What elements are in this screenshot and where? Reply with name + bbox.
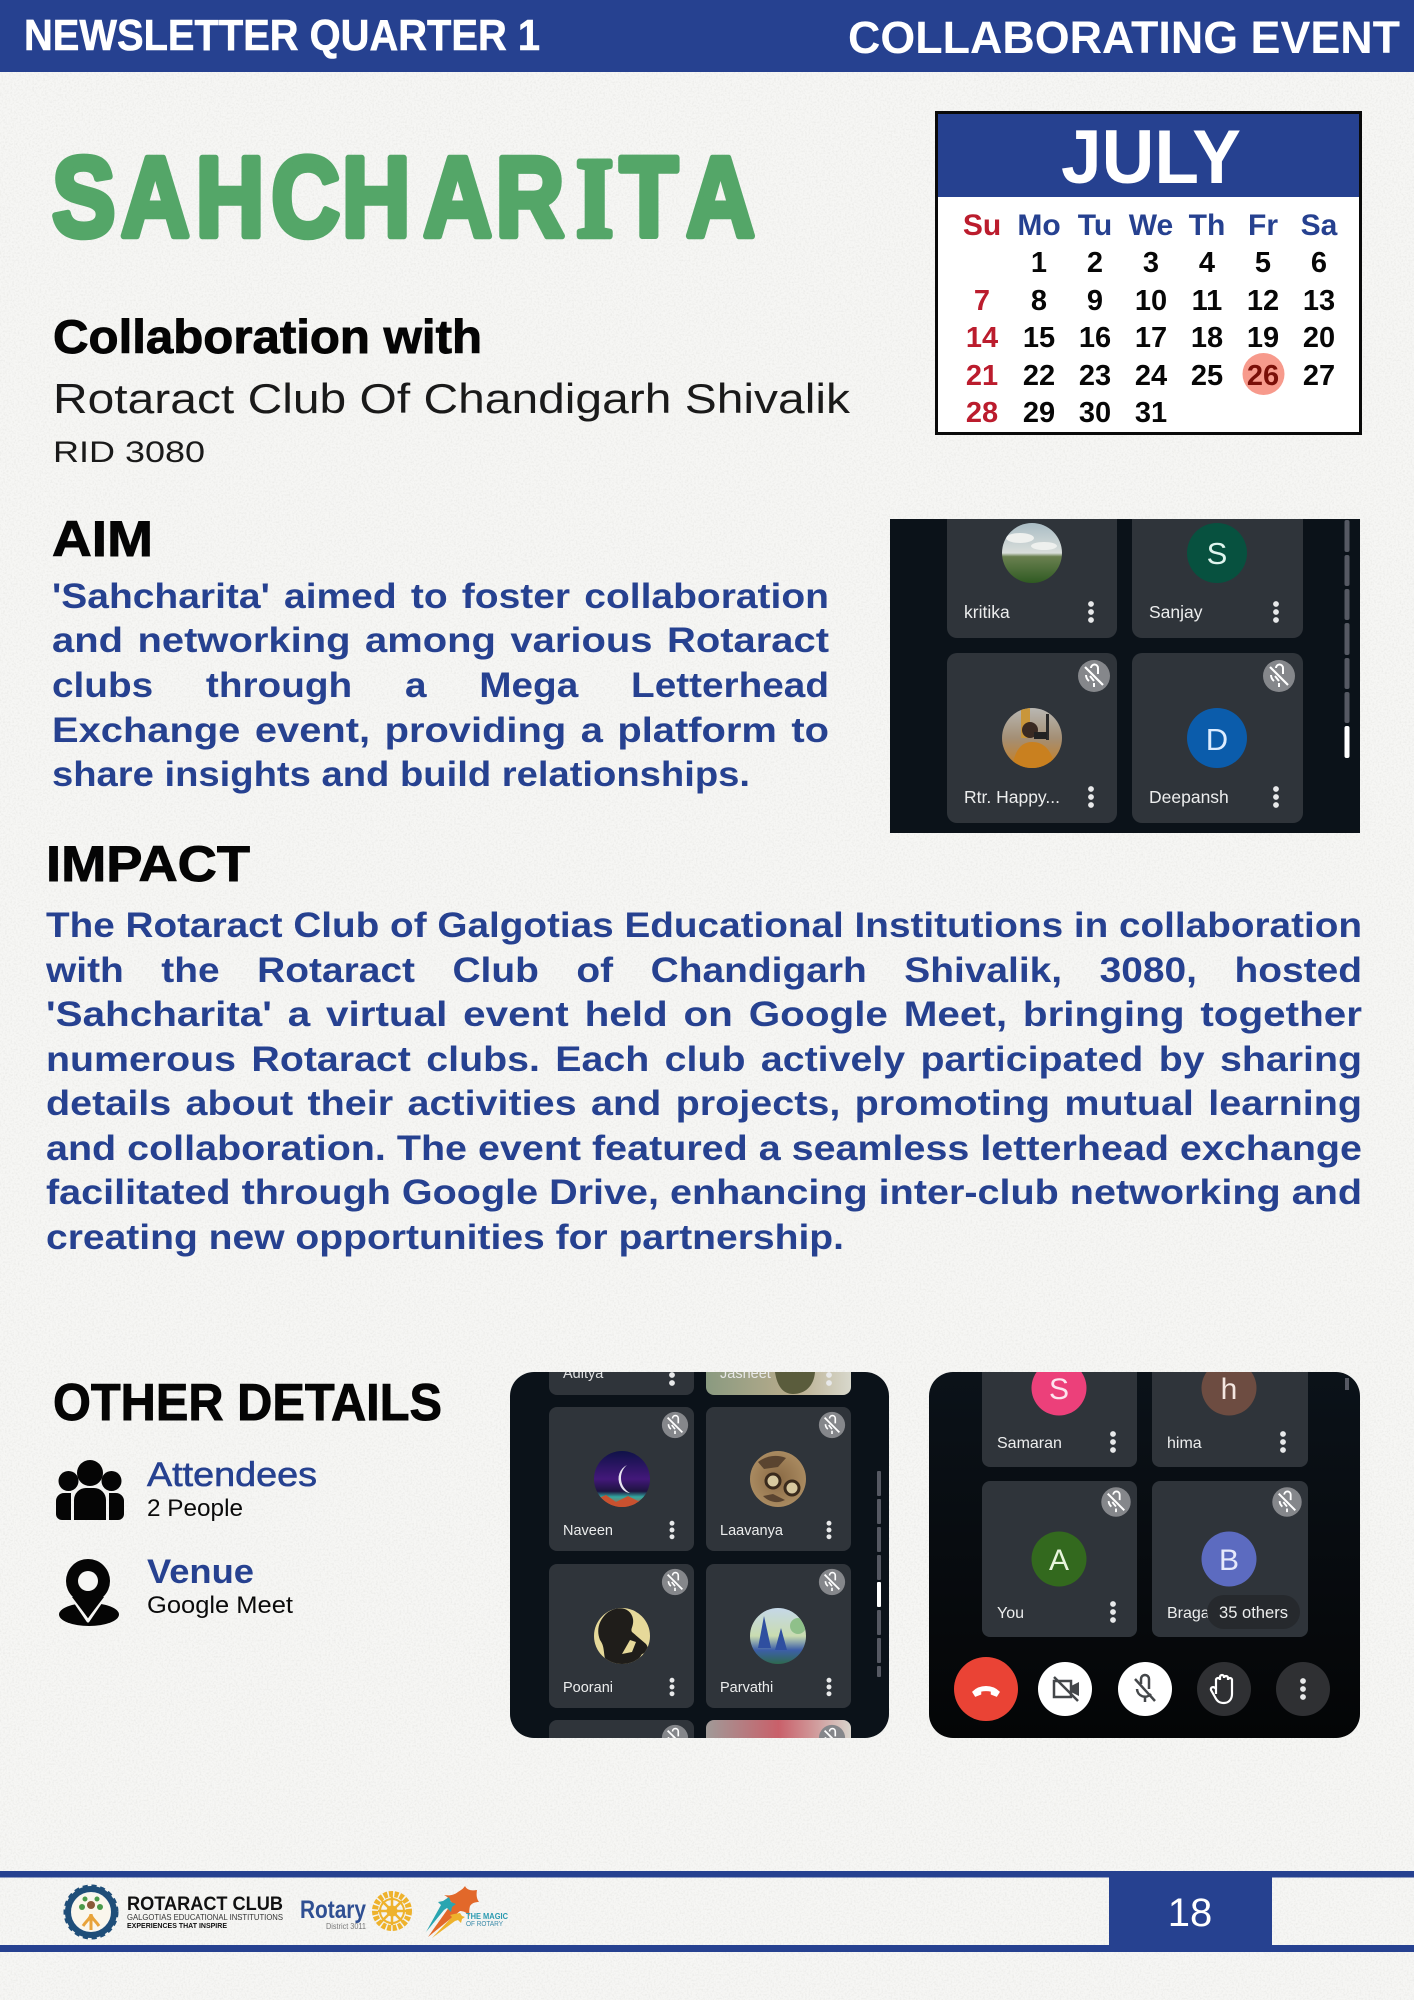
- top scroll stub: [1345, 1378, 1349, 1390]
- tile: Samaran: S: [1049, 1373, 1069, 1406]
- impact paragraph: details about their activities and projects, promoting mutual learning: [46, 1084, 1362, 1123]
- tile: Samaran: [982, 1372, 1137, 1467]
- impact section: [45, 836, 1362, 1257]
- date numbers: 7: [974, 285, 990, 317]
- tile: Bragat: B: [1219, 1544, 1239, 1577]
- tile: hima: [1152, 1372, 1308, 1467]
- highlighted date circle: [1242, 353, 1284, 395]
- page number box: [1109, 1877, 1272, 1945]
- impact paragraph: The Rotaract Club of Galgotias Educational Institutions in collaboration: [46, 906, 1362, 945]
- calendar: [936, 112, 1360, 434]
- tile: Naveen: Naveen: [563, 1523, 613, 1539]
- tile: You: A: [1049, 1544, 1069, 1577]
- aim paragraph: and networking among various Rotaract: [52, 621, 829, 660]
- logo: rotary wordmark: District 3011: [326, 1922, 366, 1931]
- date numbers: 29: [1023, 397, 1055, 429]
- venue value: Google Meet: [147, 1592, 293, 1619]
- date numbers: 3: [1143, 247, 1159, 279]
- logo: magic of rotary: [426, 1886, 508, 1938]
- date numbers: 13: [1303, 285, 1335, 317]
- tile: Bragat: [1152, 1481, 1308, 1637]
- tile: clipped bottom right: [706, 1720, 851, 1738]
- tile: Poorani: [549, 1564, 694, 1708]
- other details heading: OTHER DETAILS: [53, 1374, 442, 1432]
- page number: 18: [1168, 1891, 1212, 1935]
- participant tile: kritika: kritika: [964, 602, 1010, 622]
- date numbers: 18: [1191, 322, 1223, 354]
- date numbers: 10: [1135, 285, 1167, 317]
- logo text: rotaract club: EXPERIENCES THAT INSPIRE: [127, 1921, 227, 1930]
- tile: Jasneet: [706, 1372, 851, 1395]
- tile: Naveen: [549, 1407, 694, 1551]
- impact paragraph: facilitated through Google Drive, enhancing inter-club networking and: [46, 1173, 1362, 1212]
- date numbers: 28: [966, 397, 998, 429]
- tile: Samaran: Samaran: [997, 1435, 1062, 1452]
- title: SAHCHARITA: [52, 135, 755, 261]
- impact paragraph: creating new opportunities for partnership.: [46, 1218, 844, 1257]
- aim paragraph: 'Sahcharita' aimed to foster collaboration: [52, 577, 829, 616]
- icon: people: [56, 1460, 124, 1520]
- aim section: [52, 511, 829, 794]
- logo text: rotaract club: [127, 1894, 283, 1930]
- participant tile: Rtr. Happy: [947, 653, 1117, 823]
- date numbers: 30: [1079, 397, 1111, 429]
- date numbers: 12: [1247, 285, 1279, 317]
- impact paragraph: and collaboration. The event featured a seamless letterhead exchange: [46, 1129, 1362, 1168]
- collaboration block: [53, 310, 851, 469]
- collaboration heading: Collaboration with: [53, 310, 482, 363]
- participant tile: Deepansh: D: [1206, 722, 1228, 757]
- date numbers: 1: [1031, 247, 1047, 279]
- weekday row: Tu: [1078, 209, 1112, 242]
- header left title: NEWSLETTER QUARTER 1: [24, 11, 540, 60]
- weekday row: We: [1129, 209, 1173, 242]
- weekday row: Fr: [1248, 209, 1278, 242]
- participant tile: Sanjay: Sanjay: [1149, 602, 1203, 622]
- weekday row: Th: [1189, 209, 1225, 242]
- camera off button: [1038, 1662, 1092, 1716]
- aim paragraph: share insights and build relationships.: [52, 755, 750, 794]
- tile: Aditya: [549, 1372, 694, 1395]
- date numbers: 15: [1023, 322, 1055, 354]
- more options button: [1276, 1662, 1330, 1716]
- attendees value: 2 People: [147, 1495, 243, 1522]
- meet screenshot: middle: [510, 1372, 889, 1738]
- date numbers: 17: [1135, 322, 1167, 354]
- footer lines: [0, 1871, 1414, 1878]
- logo: magic of rotary: THE MAGIC: [466, 1912, 508, 1921]
- tile: You: [982, 1481, 1137, 1637]
- scrollbar: [1344, 520, 1350, 758]
- date numbers: 8: [1031, 285, 1047, 317]
- logo: magic of rotary: OF ROTARY: [466, 1919, 503, 1928]
- participant tile: Deepansh: Deepansh: [1149, 787, 1229, 807]
- date numbers: 24: [1135, 360, 1167, 392]
- date numbers: 27: [1303, 360, 1335, 392]
- date numbers: 6: [1311, 247, 1327, 279]
- impact paragraph: [45, 906, 1362, 1257]
- date numbers: 9: [1087, 285, 1103, 317]
- participant tile: Deepansh: [1132, 653, 1303, 823]
- tile: Parvathi: Parvathi: [720, 1680, 773, 1696]
- meet screenshot: right: [929, 1340, 1360, 1738]
- date numbers: 21: [966, 360, 998, 392]
- aim paragraph: clubs through a Mega Letterhead: [52, 666, 829, 705]
- tile: Jasneet: Jasneet: [720, 1366, 771, 1382]
- tile: Bragat: Bragat: [1167, 1605, 1215, 1622]
- impact paragraph: numerous Rotaract clubs. Each club actively participated by sharing: [46, 1040, 1362, 1079]
- tile: Poorani: Poorani: [563, 1680, 613, 1696]
- icon: location pin: [59, 1559, 119, 1626]
- header right title: COLLABORATING EVENT: [848, 12, 1400, 63]
- aim paragraph: Exchange event, providing a platform to: [52, 711, 829, 750]
- tile: Parvathi: [706, 1564, 851, 1708]
- impact paragraph: with the Rotaract Club of Chandigarh Shivalik, 3080, hosted: [45, 951, 1362, 990]
- participant tile: Sanjay: [1132, 519, 1303, 638]
- venue label: Venue: [147, 1553, 254, 1591]
- aim paragraph: [52, 577, 829, 794]
- calendar month band: [938, 114, 1359, 197]
- mic off button: [1118, 1662, 1172, 1716]
- date numbers: 2: [1087, 247, 1103, 279]
- tile: Laavanya: Laavanya: [720, 1523, 784, 1539]
- tile: Laavanya: [706, 1407, 851, 1551]
- weekday row: Su: [963, 209, 1001, 242]
- date numbers: 16: [1079, 322, 1111, 354]
- date numbers: 11: [1192, 285, 1222, 317]
- date numbers: 14: [966, 322, 998, 354]
- date numbers: 22: [1023, 360, 1055, 392]
- date numbers: 26: [1247, 360, 1279, 392]
- end call button: [954, 1657, 1018, 1721]
- date numbers: 19: [1247, 322, 1279, 354]
- tile: You: You: [997, 1605, 1024, 1622]
- tile: Aditya: Aditya: [563, 1366, 604, 1382]
- date numbers: 20: [1303, 322, 1335, 354]
- logo text: rotaract club: GALGOTIAS EDUCATIONAL INSTITUTIONS: [127, 1912, 283, 1922]
- district: RID 3080: [53, 436, 205, 469]
- participant tile: kritika: [947, 519, 1117, 638]
- impact paragraph: 'Sahcharita' a virtual event held on Google Meet, bringing together: [46, 995, 1362, 1034]
- logo: rotaract gear: [66, 1886, 116, 1938]
- logo: rotary wordmark: Rotary: [300, 1896, 366, 1924]
- others pill: [1207, 1595, 1300, 1629]
- other details section: [53, 1374, 442, 1626]
- weekday row: Sa: [1301, 209, 1338, 242]
- date numbers: 25: [1191, 360, 1223, 392]
- logo text: rotaract club: ROTARACT CLUB: [127, 1894, 283, 1915]
- partner club name: Rotaract Club Of Chandigarh Shivalik: [53, 375, 851, 422]
- weekday row: Mo: [1017, 209, 1061, 242]
- raise hand button: [1197, 1662, 1251, 1716]
- month name: JULY: [1061, 115, 1241, 200]
- scrollbar: [877, 1471, 881, 1677]
- tile: hima: hima: [1167, 1435, 1202, 1452]
- tile: clipped bottom left: [549, 1720, 694, 1738]
- participant tile: Sanjay: S: [1207, 536, 1227, 571]
- date numbers: 23: [1079, 360, 1111, 392]
- date numbers: 5: [1255, 247, 1271, 279]
- header band: [0, 0, 1414, 72]
- date numbers: 4: [1199, 247, 1215, 279]
- impact heading: IMPACT: [46, 836, 250, 892]
- meet screenshot: top right: [890, 500, 1360, 833]
- attendees label: Attendees: [147, 1456, 317, 1494]
- date numbers: [966, 247, 1335, 429]
- participant tile: Rtr. Happy: Rtr. Happy...: [964, 787, 1060, 807]
- others pill: 35 others: [1219, 1604, 1288, 1622]
- date numbers: 31: [1135, 397, 1167, 429]
- weekday row: [963, 209, 1338, 242]
- tile: hima: h: [1221, 1373, 1237, 1406]
- aim heading: AIM: [52, 511, 153, 567]
- logo: rotary wordmark: [300, 1896, 366, 1931]
- footer: [0, 1871, 1414, 1952]
- logo: rotary wheel: [375, 1894, 409, 1928]
